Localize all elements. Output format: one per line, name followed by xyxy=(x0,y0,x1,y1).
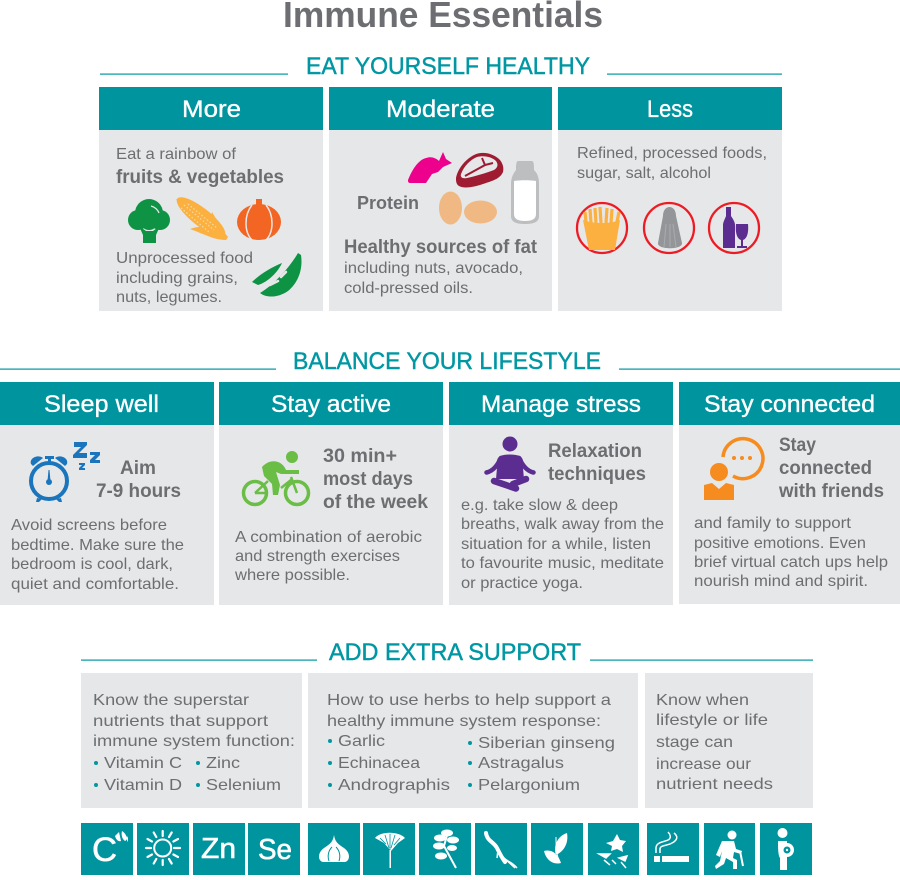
heading: less: Less xyxy=(647,96,693,123)
text: relaxation techniques xyxy=(548,441,646,485)
icon: walking elder xyxy=(704,823,755,875)
text: healthy sources of fat: cold-pressed oils. xyxy=(344,280,473,297)
text: sleep advice: Avoid screens before xyxy=(11,517,167,534)
list: herbs: Andrographis xyxy=(338,777,450,794)
icon: smoking xyxy=(647,823,699,875)
panel: manage stress xyxy=(449,382,673,605)
icon: zzz xyxy=(73,442,100,470)
text: sleep advice xyxy=(11,517,184,593)
icon: person with speech bubble xyxy=(704,439,763,500)
panel: nutrients: nutrients that support xyxy=(93,713,269,730)
panel: nutrient needs: lifestyle or life xyxy=(656,712,768,729)
text: eat a rainbow: Eat a rainbow of xyxy=(116,146,237,163)
text: stress advice xyxy=(461,497,664,592)
panel: nutrient needs: nutrient needs xyxy=(656,776,773,793)
panel: nutrient needs: Know when xyxy=(656,692,749,709)
icon: steak xyxy=(456,153,503,187)
icon: andrographis xyxy=(419,823,471,875)
heading: more: More xyxy=(182,96,241,123)
section heading: balance your lifestyle: BALANCE YOUR LIFESTYLE xyxy=(293,348,601,375)
panel: nutrient needs: stage can xyxy=(656,734,733,751)
text: unprocessed food: including grains, xyxy=(116,270,238,287)
text: connection advice: and family to support xyxy=(694,515,852,532)
text: aim 7-9 hours: 7-9 hours xyxy=(96,481,181,502)
section heading: add extra support: ADD EXTRA SUPPORT xyxy=(329,639,581,666)
icon: echinacea xyxy=(363,823,415,875)
icon: fries xyxy=(577,203,627,253)
text: healthy sources of fat: Healthy sources of fat xyxy=(344,237,538,258)
panel: nutrients xyxy=(81,673,302,808)
icon: vitamin d sun xyxy=(137,823,189,875)
text: activity advice: A combination of aerobic xyxy=(235,529,422,546)
icon: vitamin c: C xyxy=(92,831,117,869)
text: unprocessed food: nuts, legumes. xyxy=(116,289,222,306)
icon: cyclist xyxy=(244,451,308,504)
icon: garlic xyxy=(308,823,360,875)
icon: zinc xyxy=(193,823,245,875)
text: 30 min most days: of the week xyxy=(323,492,428,513)
icon: alarm clock xyxy=(31,456,67,502)
text: activity advice: where possible. xyxy=(234,567,350,584)
text: connection advice: nourish mind and spirit. xyxy=(694,573,868,590)
icon: pregnant figure xyxy=(760,823,812,875)
list: nutrients: Vitamin D xyxy=(104,777,182,794)
text: relaxation techniques: techniques xyxy=(548,464,646,485)
panel: moderate xyxy=(329,87,552,311)
text: stay connected with friends: connected xyxy=(779,458,872,479)
panel: nutrients: immune system function: xyxy=(93,733,295,750)
text: unprocessed food xyxy=(116,250,253,306)
text: eat a rainbow: fruits & vegetables xyxy=(116,167,284,188)
list: herbs: Echinacea xyxy=(338,755,420,772)
list: nutrients xyxy=(94,755,281,794)
text: sleep advice: bedtime. Make sure the xyxy=(11,537,184,554)
list: herbs xyxy=(328,733,615,794)
icon: broccoli xyxy=(128,199,170,243)
icon: eggs xyxy=(439,192,497,224)
text: stress advice: breaths, walk away from the xyxy=(461,516,664,533)
text: stay connected with friends: with friends xyxy=(778,481,884,502)
list: herbs: Pelargonium xyxy=(478,777,580,794)
panel: herbs: healthy immune system response: xyxy=(327,713,601,730)
list: nutrients: Selenium xyxy=(206,777,281,794)
icon: selenium xyxy=(248,823,300,875)
heading: sleep well: Sleep well xyxy=(44,391,159,418)
text: activity advice: and strength exercises xyxy=(235,548,400,565)
text: relaxation techniques: Relaxation xyxy=(548,441,642,462)
text: healthy sources of fat xyxy=(344,237,538,297)
heading: stay connected: Stay connected xyxy=(704,391,875,418)
text: stress advice: or practice yoga. xyxy=(461,575,583,592)
panel: more xyxy=(99,87,323,311)
icon: corn xyxy=(172,191,230,243)
section heading: eat yourself healthy: EAT YOURSELF HEALTHY xyxy=(306,53,590,80)
text: unprocessed food: Unprocessed food xyxy=(116,250,253,267)
text: connection advice: brief virtual catch ups help xyxy=(694,554,888,571)
list: herbs: Astragalus xyxy=(478,755,564,772)
text: refined foods xyxy=(577,145,767,182)
text: aim 7-9 hours: Aim xyxy=(120,458,156,479)
panel: nutrients: Know the superstar xyxy=(93,692,250,709)
text: refined foods: sugar, salt, alcohol xyxy=(577,165,711,182)
icon: siberian ginseng root xyxy=(475,823,527,875)
panel: nutrient needs xyxy=(645,673,813,808)
text: connection advice: positive emotions. Even xyxy=(694,535,866,552)
text: 30 min most days xyxy=(323,446,428,513)
icon: fish xyxy=(408,152,452,183)
heading: manage stress: Manage stress xyxy=(481,391,641,418)
text: eat a rainbow xyxy=(116,146,284,188)
text: 30 min most days: most days xyxy=(323,469,413,490)
text: activity advice xyxy=(234,529,422,584)
panel: nutrient needs: increase our xyxy=(656,756,752,773)
icon: selenium: Se xyxy=(258,834,292,866)
icon: pumpkin xyxy=(237,199,281,240)
icon: pea pod xyxy=(252,253,301,297)
heading: stay active: Stay active xyxy=(271,391,391,418)
list: herbs: Siberian ginseng xyxy=(478,735,615,752)
text: protein: Protein xyxy=(357,193,419,213)
icon: astragalus xyxy=(531,823,583,875)
text: connection advice xyxy=(694,515,888,590)
panel: herbs xyxy=(308,673,638,808)
list: herbs: Garlic xyxy=(338,733,385,750)
text: stay connected with friends xyxy=(778,435,884,502)
panel: sleep well xyxy=(0,382,214,605)
panel: stay active xyxy=(219,382,443,605)
icon: milk bottle xyxy=(511,161,539,224)
list: nutrients: Zinc xyxy=(206,755,240,772)
icon: pelargonium xyxy=(588,823,639,875)
icon: meditating figure xyxy=(486,436,534,488)
text: stay connected with friends: Stay xyxy=(779,435,816,456)
icon: salt shaker xyxy=(644,203,694,253)
text: refined foods: Refined, processed foods, xyxy=(577,145,767,162)
heading: moderate: Moderate xyxy=(386,96,495,123)
text: stress advice: situation for a while, listen xyxy=(461,536,651,553)
text: aim 7-9 hours xyxy=(96,458,181,502)
panel: stay connected xyxy=(679,382,900,604)
text: sleep advice: bedroom is cool, dark, xyxy=(11,556,173,573)
text: healthy sources of fat: including nuts, avocado, xyxy=(344,260,523,277)
text: stress advice: to favourite music, meditate xyxy=(461,555,664,572)
text: stress advice: e.g. take slow & deep xyxy=(461,497,618,514)
panel: less xyxy=(558,87,782,311)
text: sleep advice: quiet and comfortable. xyxy=(11,576,179,593)
icon: zinc: Zn xyxy=(201,833,236,865)
list: nutrients: Vitamin C xyxy=(104,755,182,772)
icon: wine xyxy=(709,203,759,253)
panel: herbs: How to use herbs to help support a xyxy=(327,692,611,709)
icon: vitamin c xyxy=(81,823,133,875)
text: 30 min most days: 30 min+ xyxy=(323,446,397,467)
